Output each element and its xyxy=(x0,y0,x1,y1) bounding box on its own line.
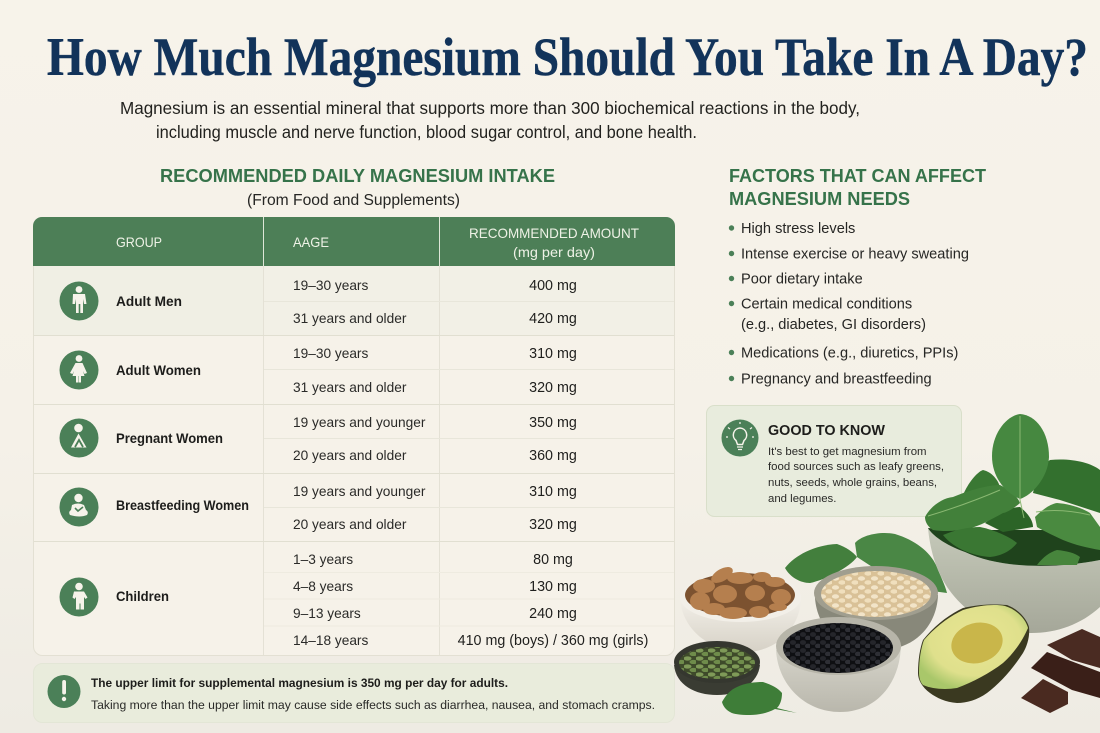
row: children: 130 mg xyxy=(529,579,577,595)
factors list: Pregnancy and breastfeeding xyxy=(741,372,932,388)
row: pregnant women: 19 years and younger xyxy=(293,415,426,430)
factors list: Medications (e.g., diuretics, PPIs) xyxy=(741,346,958,362)
row: breastfeeding women: 19 years and younger xyxy=(293,484,426,499)
row: adult women: 19–30 years xyxy=(293,346,368,361)
row: children: 1–3 years xyxy=(293,552,353,567)
row: pregnant women: 20 years and older xyxy=(293,448,407,463)
avocado xyxy=(918,604,1029,703)
row: adult men: 420 mg xyxy=(529,311,577,327)
bowl: black beans xyxy=(776,617,901,712)
food illustration xyxy=(674,414,1100,715)
bowl: oats xyxy=(814,566,938,650)
callout: good to know: food sources such as leafy greens, xyxy=(768,461,944,473)
row: adult men: 400 mg xyxy=(529,278,577,294)
intake table xyxy=(33,217,675,656)
factors list: Intense exercise or heavy sweating xyxy=(741,246,969,262)
row: children: 240 mg xyxy=(529,606,577,622)
callout: upper limit: Taking more than the upper limit may cause side effects such as diarrhea, nausea, and stomach cramps. xyxy=(91,698,655,712)
bowl: almonds xyxy=(680,564,801,652)
heading: factors: FACTORS THAT CAN AFFECT xyxy=(729,166,986,186)
callout: good to know: and legumes. xyxy=(768,493,836,505)
row: children xyxy=(60,552,648,649)
callout: upper limit: The upper limit for supplemental magnesium is 350 mg per day for adults. xyxy=(91,676,508,690)
table header: GROUP xyxy=(116,234,162,250)
intro text xyxy=(120,98,860,142)
row: adult women xyxy=(60,346,577,396)
intro text: including muscle and nerve function, blood sugar control, and bone health. xyxy=(156,122,697,142)
factors list: Poor dietary intake xyxy=(741,272,863,288)
row: pregnant women: Pregnant Women xyxy=(116,431,223,446)
table header: RECOMMENDED AMOUNT xyxy=(469,225,639,241)
table header: AAGE xyxy=(293,234,329,250)
callout: upper limit xyxy=(34,664,674,722)
row: children: 80 mg xyxy=(533,552,573,568)
spinach leaves behind xyxy=(785,533,947,593)
row: adult men xyxy=(60,278,577,327)
row: adult women: 320 mg xyxy=(529,380,577,396)
heading: recommended intake: (From Food and Supplements) xyxy=(247,192,460,209)
heading: factors: MAGNESIUM NEEDS xyxy=(729,189,910,209)
row: children: 14–18 years xyxy=(293,633,368,648)
row: adult men: Adult Men xyxy=(116,294,182,309)
row: adult men: 31 years and older xyxy=(293,311,407,326)
row: pregnant women: 350 mg xyxy=(529,415,577,431)
factors list: Certain medical conditions xyxy=(741,296,912,312)
factors list: (e.g., diabetes, GI disorders) xyxy=(741,317,926,333)
small leaf xyxy=(722,682,797,715)
row: breastfeeding women: 20 years and older xyxy=(293,517,407,532)
row: adult women: 31 years and older xyxy=(293,380,407,395)
factors list: High stress levels xyxy=(741,221,855,237)
callout: good to know xyxy=(706,406,962,516)
factors list xyxy=(729,221,969,388)
row: children: Children xyxy=(116,589,169,604)
callout: good to know: It's best to get magnesium from xyxy=(768,446,927,458)
callout: good to know: GOOD TO KNOW xyxy=(768,423,885,439)
intro text: Magnesium is an essential mineral that supports more than 300 biochemical reactions in the body, xyxy=(120,98,860,118)
chocolate xyxy=(1021,629,1100,713)
heading: recommended intake xyxy=(160,166,555,209)
row: adult women: 310 mg xyxy=(529,346,577,362)
table header: (mg per day) xyxy=(513,244,595,260)
almonds xyxy=(690,564,791,619)
row: adult men: 19–30 years xyxy=(293,278,368,293)
table header xyxy=(116,225,639,260)
row: pregnant women: 360 mg xyxy=(529,448,577,464)
bowl: spinach xyxy=(925,414,1100,633)
icon: warning xyxy=(48,675,80,708)
row: breastfeeding women xyxy=(60,484,577,533)
bowl: pumpkin seeds xyxy=(674,641,760,695)
row: breastfeeding women: Breastfeeding Women xyxy=(116,498,249,513)
heading: recommended intake: RECOMMENDED DAILY MAGNESIUM INTAKE xyxy=(160,166,555,186)
icon: light bulb xyxy=(722,420,758,456)
row: pregnant women xyxy=(60,415,577,464)
row: breastfeeding women: 310 mg xyxy=(529,484,577,500)
row: children: 4–8 years xyxy=(293,579,353,594)
row: children: 410 mg (boys) / 360 mg (girls) xyxy=(458,633,648,649)
row: adult women: Adult Women xyxy=(116,363,201,378)
row: breastfeeding women: 320 mg xyxy=(529,517,577,533)
spinach xyxy=(925,414,1100,565)
callout: good to know: nuts, seeds, whole grains, beans, xyxy=(768,477,937,489)
heading: factors xyxy=(729,166,986,209)
row: children: 9–13 years xyxy=(293,606,361,621)
